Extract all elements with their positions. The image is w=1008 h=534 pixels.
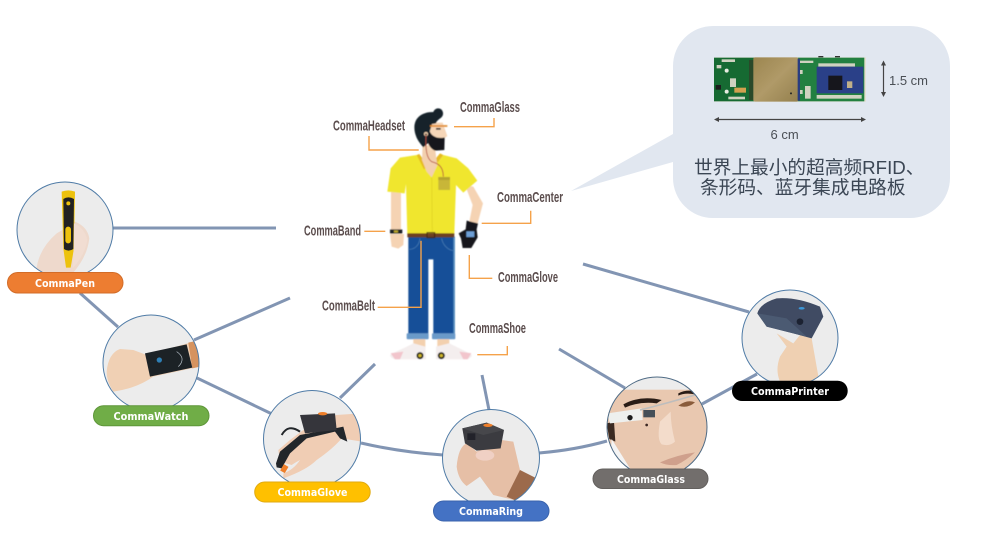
central person illustration (387, 108, 483, 359)
label: CommaBelt: CommaBelt (322, 298, 375, 315)
dimension: 6 cm: 6 cm (770, 127, 799, 142)
label: CommaBand: CommaBand (304, 223, 361, 240)
device: CommaPrinter (732, 290, 848, 401)
label: CommaHeadset (333, 118, 419, 150)
label: CommaShoe (469, 320, 526, 355)
pill: CommaGlove: CommaGlove (278, 486, 348, 499)
head (414, 108, 447, 177)
circuit board photo (714, 56, 866, 102)
dimension arrow: width (714, 117, 866, 122)
dimension arrow: height (881, 60, 886, 97)
connector lines (80, 228, 757, 455)
label: CommaCenter (482, 189, 563, 223)
callout bubble (571, 26, 950, 218)
pill: CommaWatch: CommaWatch (114, 410, 188, 423)
label: CommaGlass: CommaGlass (460, 99, 520, 116)
label: CommaShoe: CommaShoe (469, 320, 526, 337)
callout text: 世界上最小的超高频RFID、 (694, 157, 924, 178)
device: CommaGlove (255, 390, 370, 502)
label: CommaGlove: CommaGlove (498, 269, 558, 286)
callout text: 条形码、蓝牙集成电路板 (700, 177, 906, 198)
device: CommaPen (8, 182, 123, 293)
label: CommaHeadset: CommaHeadset (333, 118, 405, 135)
device: CommaGlass (593, 377, 710, 488)
label: CommaGlass (454, 99, 520, 127)
label: CommaCenter: CommaCenter (497, 189, 563, 206)
label: CommaBelt (322, 241, 421, 315)
pill: CommaGlass: CommaGlass (617, 473, 685, 486)
label: CommaGlove (469, 255, 558, 286)
pill: CommaRing: CommaRing (459, 505, 523, 518)
pill: CommaPrinter: CommaPrinter (751, 385, 829, 398)
pill: CommaPen: CommaPen (35, 277, 95, 290)
dimension: 1.5 cm: 1.5 cm (889, 73, 928, 88)
callout text (694, 157, 924, 198)
device: CommaWatch (94, 315, 209, 426)
device: CommaRing (434, 410, 549, 521)
